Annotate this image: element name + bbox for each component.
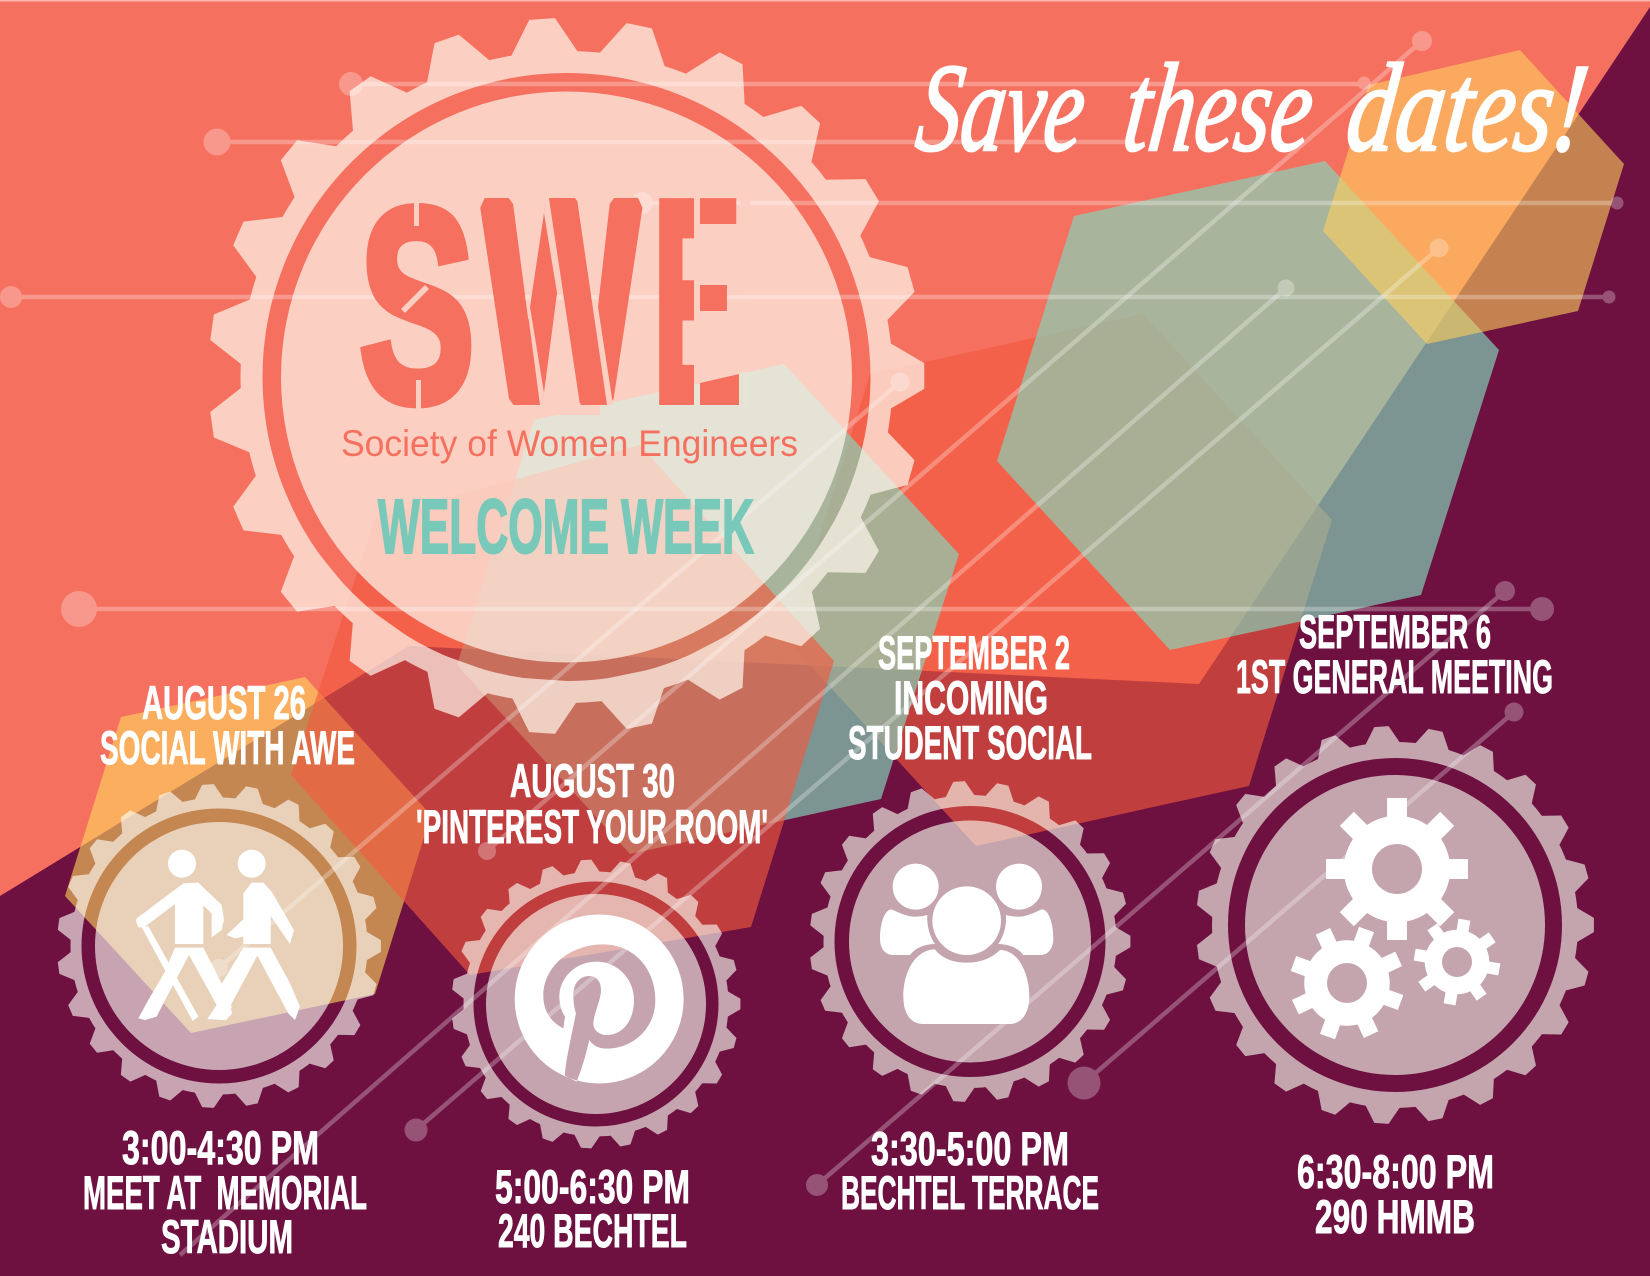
logo: SWE — [359, 140, 750, 462]
icon: walkers — [136, 850, 300, 1021]
icon: pinterest — [515, 914, 684, 1083]
hexagon: red-orange centre — [787, 314, 1332, 846]
icon: cogs — [1274, 798, 1507, 1056]
time and place: student social: BECHTEL TERRACE — [841, 1166, 1099, 1219]
gear: people — [809, 780, 1130, 1103]
event label: September 2: SEPTEMBER 2 — [878, 626, 1070, 679]
event label: September 6 — [1236, 605, 1553, 703]
event label: August 30: AUGUST 30 — [510, 754, 675, 807]
event label: September 2 — [848, 626, 1092, 769]
hexagon: orange lower left — [65, 677, 431, 1033]
logo: SWE: W — [485, 147, 638, 457]
title: Save these dates! — [910, 38, 1595, 178]
hexagon: orange top right — [1323, 50, 1624, 344]
hexagon: red-orange lower — [291, 445, 834, 975]
logo: SWE: E — [652, 140, 742, 462]
time and place: general meeting: 290 HMMB — [1315, 1190, 1475, 1243]
icon: people — [880, 864, 1053, 1024]
logo: SWE: S — [359, 151, 475, 459]
event label: August 26 — [100, 676, 355, 774]
time and place: student social — [841, 1122, 1099, 1219]
time and place: walk: MEET AT MEMORIAL — [83, 1166, 367, 1219]
event label: September 2: INCOMING — [894, 671, 1048, 724]
time and place: student social: 3:30-5:00 PM — [871, 1122, 1069, 1175]
time and place: pinterest: 240 BECHTEL — [498, 1204, 687, 1257]
time and place: walk: STADIUM — [161, 1210, 293, 1263]
event label: September 2: STUDENT SOCIAL — [848, 716, 1092, 769]
time and place: general meeting — [1297, 1145, 1494, 1243]
title: Save these dates!: these — [1117, 38, 1321, 178]
event label: September 6: SEPTEMBER 6 — [1299, 605, 1491, 658]
event label: August 30 — [416, 754, 768, 853]
event label: August 26: AUGUST 26 — [142, 676, 306, 729]
time and place: general meeting: 6:30-8:00 PM — [1297, 1145, 1494, 1198]
time and place: pinterest — [495, 1160, 690, 1257]
gear: walkers — [57, 783, 381, 1109]
time and place: walk — [83, 1121, 367, 1263]
time and place: walk: 3:00-4:30 PM — [122, 1121, 319, 1174]
event label: August 30: 'PINTEREST YOUR ROOM' — [416, 800, 768, 853]
gear: cogs — [1195, 725, 1594, 1125]
gear: pinterest — [451, 859, 740, 1149]
heading: WELCOME WEEK: WELCOME WEEK — [378, 484, 754, 570]
hexagon: sage upper right — [997, 161, 1499, 650]
event label: August 26: SOCIAL WITH AWE — [100, 721, 355, 774]
time and place: pinterest: 5:00-6:30 PM — [495, 1160, 690, 1213]
title: Save these dates!: Save — [910, 38, 1093, 178]
main gear — [207, 17, 924, 735]
subtitle: Society of Women Engineers: Society of Women Engineers — [341, 423, 798, 464]
hexagon: sage behind main gear — [457, 364, 959, 854]
